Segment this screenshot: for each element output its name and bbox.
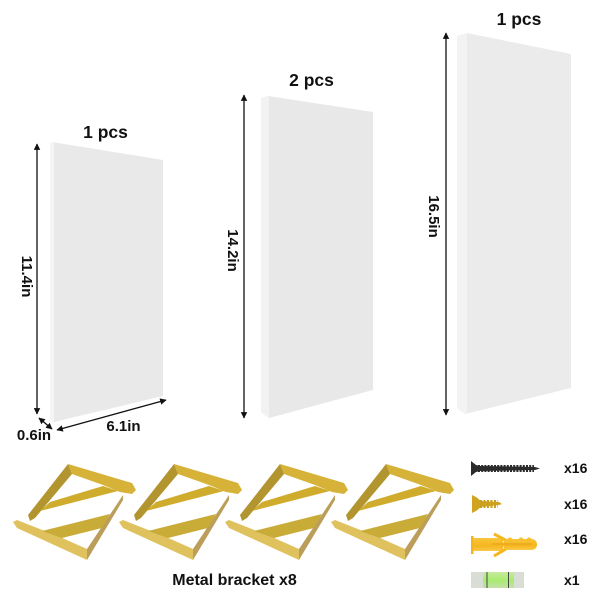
count: level x1: x1: [564, 572, 580, 588]
icon: bracket set 4: [331, 464, 454, 560]
icon: bracket set 3: [225, 464, 348, 560]
label: metal bracket: Metal bracket x8: [172, 572, 297, 589]
icon: yellow wall anchor: [471, 534, 537, 556]
arrow: medium shelf height: [243, 95, 245, 418]
label: 1 pcs small shelf: 1 pcs: [83, 122, 128, 142]
dimension: 14.2in: 14.2in: [224, 229, 241, 272]
dimension: 11.4in: 11.4in: [18, 256, 35, 297]
count: anchor x16: x16: [564, 531, 588, 547]
dimension: 16.5in: 16.5in: [425, 195, 442, 238]
dimension: 6.1in: 6.1in: [106, 418, 141, 435]
panel: small shelf: [50, 142, 163, 422]
icon: bubble level: [471, 572, 524, 588]
count: gold screw x16: x16: [564, 496, 588, 512]
count: screw x16: x16: [564, 460, 588, 476]
label: 2 pcs medium shelf: 2 pcs: [289, 70, 334, 90]
arrow: large shelf height: [445, 33, 447, 415]
icon: black screw: [471, 461, 540, 476]
arrow: depth: [39, 418, 52, 429]
arrow: width: [57, 400, 166, 430]
label: 1 pcs large shelf: 1 pcs: [497, 9, 542, 29]
dimension: 0.6in: 0.6in: [17, 427, 51, 444]
icon: bracket set 1: [13, 464, 136, 560]
panel: large shelf: [457, 33, 571, 414]
icon: bracket set 2: [119, 464, 242, 560]
panel: medium shelf: [261, 96, 373, 418]
arrow: small shelf height: [36, 144, 38, 414]
icon: gold screw: [472, 495, 502, 513]
